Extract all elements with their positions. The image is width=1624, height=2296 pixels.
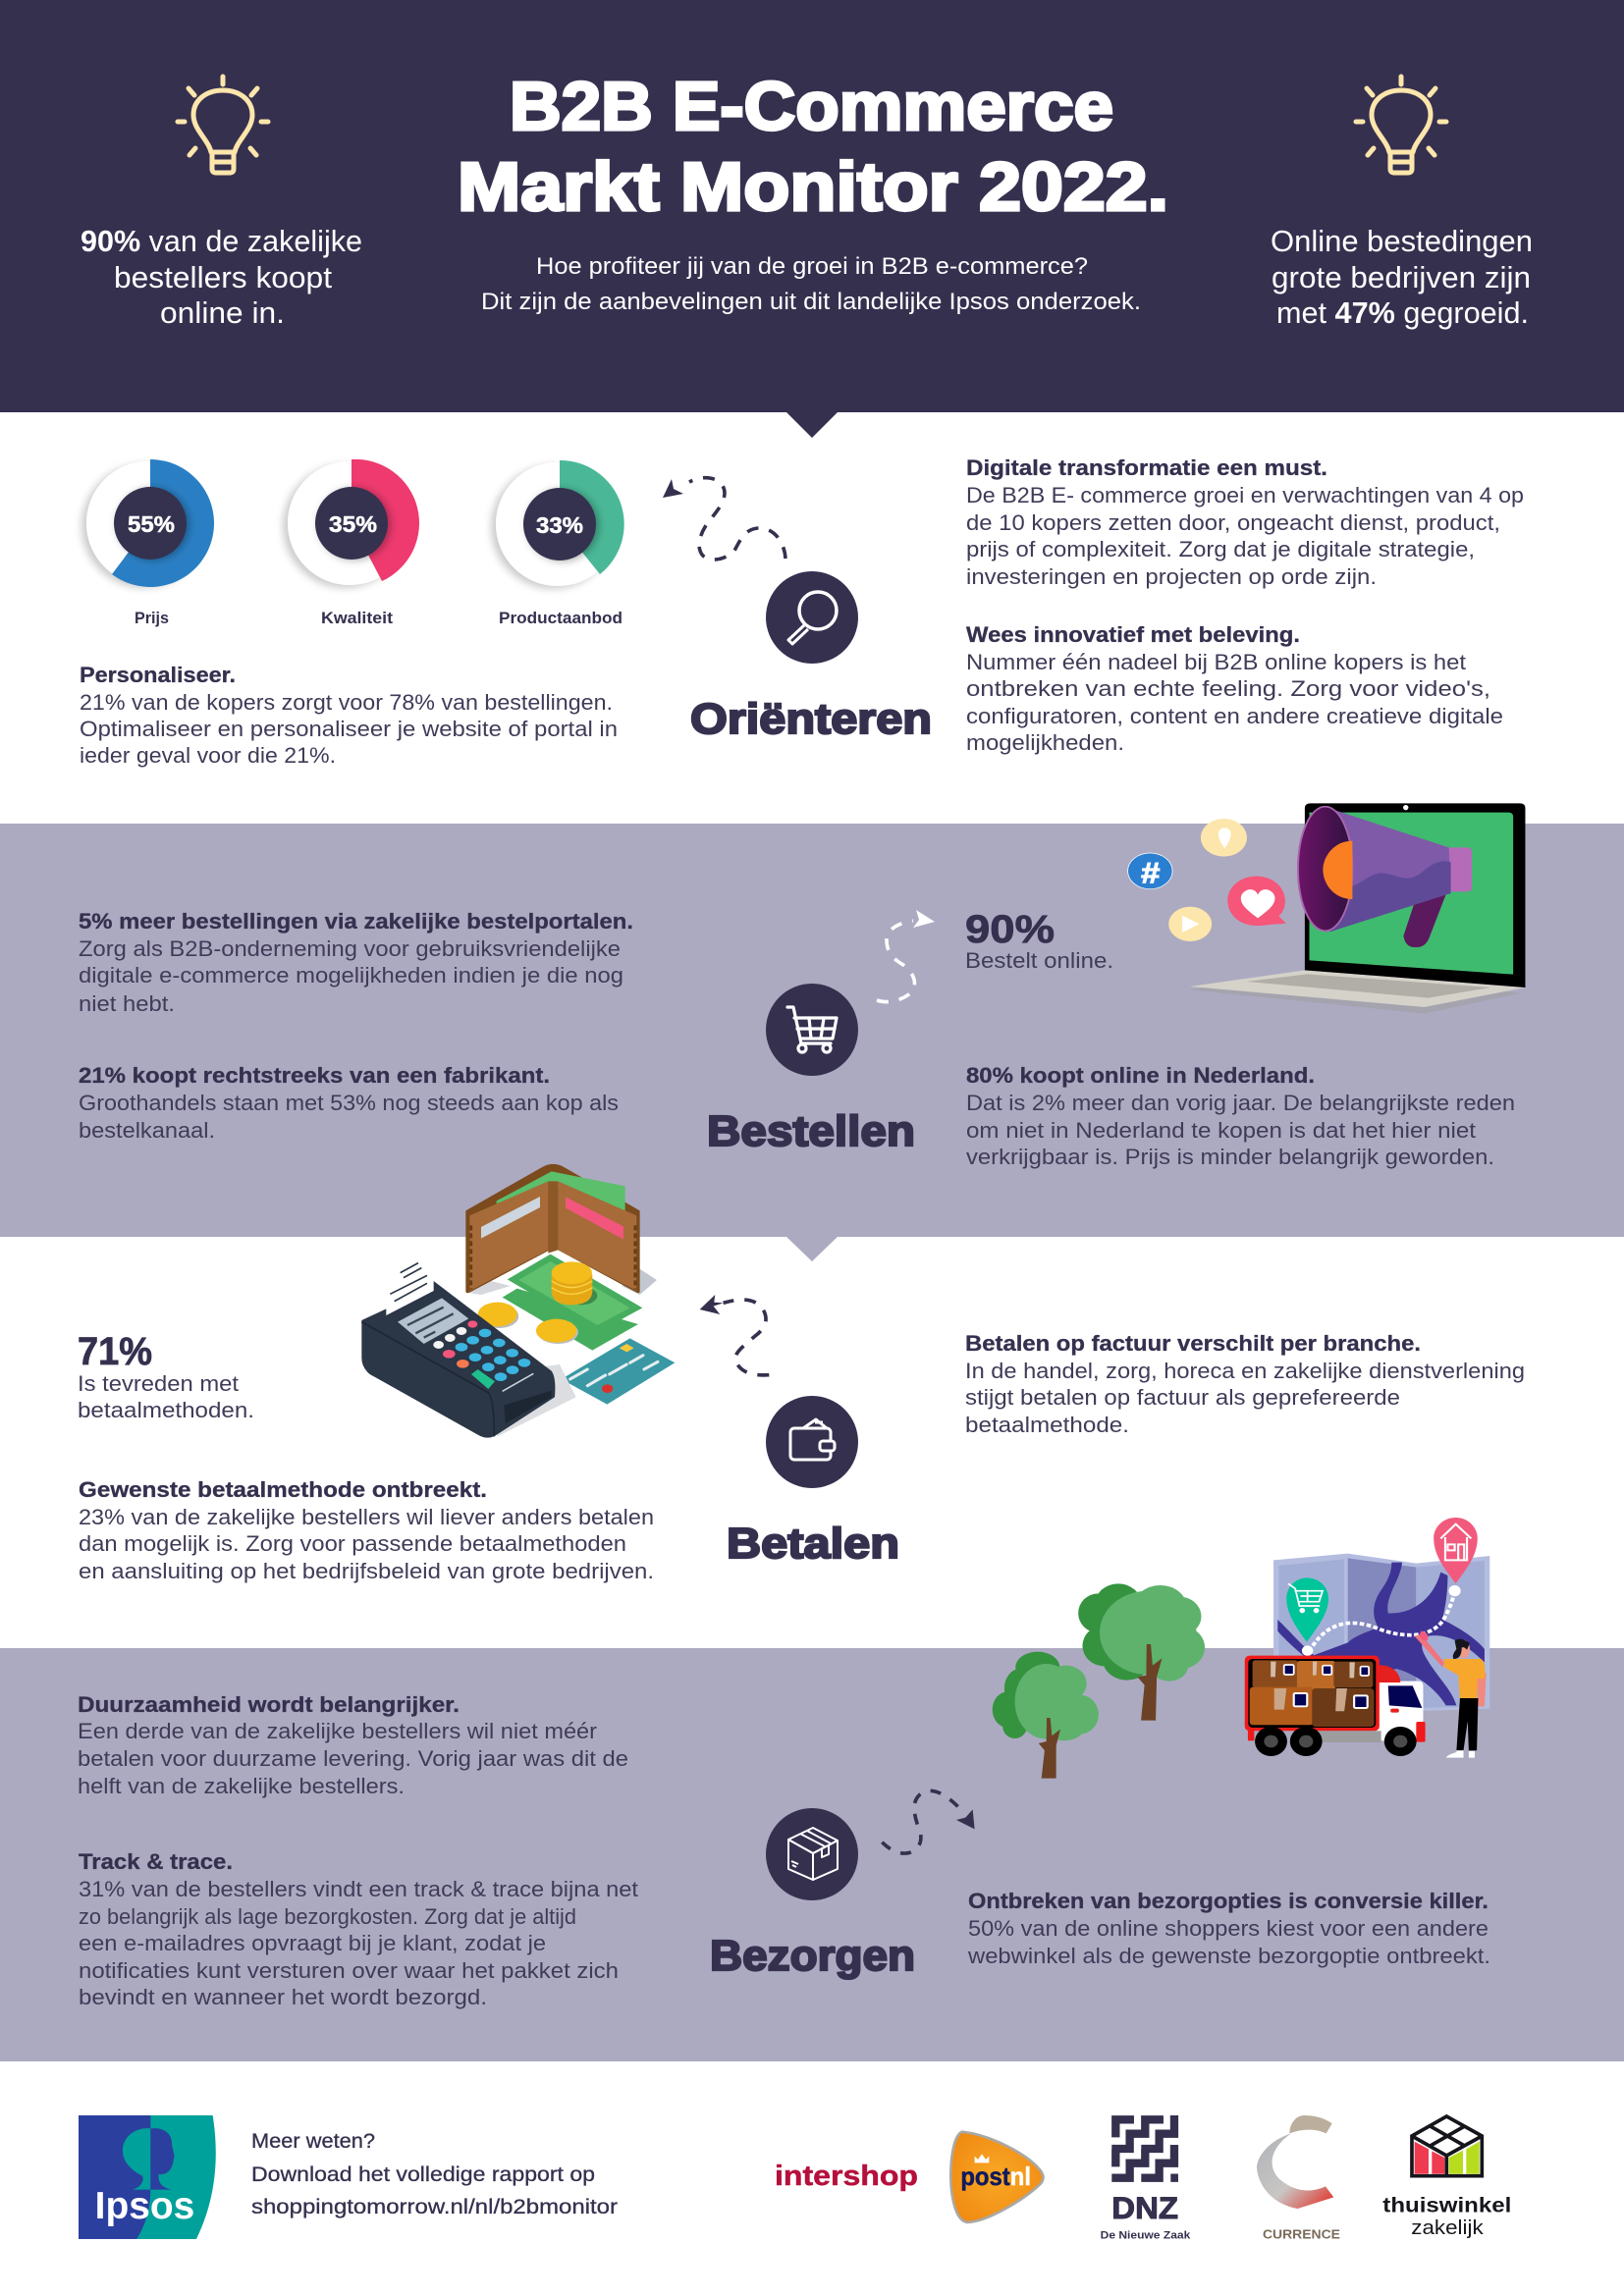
- text block: factuur: betaalmethode.: [965, 1413, 1129, 1437]
- text block: Wees innovatief: mogelijkheden.: [966, 730, 1124, 755]
- text block: Digitale transformatie: prijs of complexiteit. Zorg dat je digitale strategie,: [966, 537, 1475, 561]
- stat: 90% bestelt online: [965, 908, 1113, 973]
- subtitle: Dit zijn de aanbevelingen uit dit landelijke Ipsos onderzoek.: [481, 289, 1141, 315]
- logo: Currence: CURRENCE: [1263, 2228, 1340, 2242]
- text block: 80% Nederland: om niet in Nederland te kopen is dat het hier niet: [966, 1118, 1476, 1143]
- stat: 90%: 90% van de zakelijke: [81, 224, 362, 258]
- text block: Gewenste betaalmethode: dan mogelijk is. Zorg voor passende betaalmethoden: [79, 1531, 626, 1556]
- text block: rechtstreeks fabrikant: Groothandels staan met 53% nog steeds aan kop als: [79, 1091, 619, 1115]
- text block: Personaliseer: 21% van de kopers zorgt voor 78% van bestellingen.: [80, 690, 613, 715]
- arrow: Bestellen dashed: [877, 910, 935, 1002]
- logo: thuiswinkel zakelijk: [1382, 2116, 1511, 2239]
- text block: Wees innovatief: [966, 622, 1503, 755]
- stat: 71% tevreden: Is tevreden met: [78, 1371, 239, 1396]
- text block: Wees innovatief: Wees innovatief met beleving.: [966, 622, 1300, 647]
- text block: bestelportalen: Zorg als B2B-onderneming voor gebruiksvriendelijke: [79, 936, 621, 961]
- text block: 80% Nederland: [966, 1063, 1515, 1169]
- text block: Digitale transformatie: Digitale transformatie een must.: [966, 455, 1327, 480]
- logo: Ipsos: Ipsos: [95, 2184, 194, 2227]
- text block: Track & trace: een e-mailadres opvraagt bij je klant, zodat je: [79, 1931, 546, 1955]
- text block: Personaliseer: ieder geval voor die 21%.: [80, 743, 336, 768]
- logo: DNZ De Nieuwe Zaak: DNZ: [1111, 2190, 1178, 2225]
- donut chart: Prijs 55%: 55%: [128, 511, 175, 537]
- heading: Orienteren: Oriënteren: [690, 695, 932, 743]
- stat: 90% bestelt online: Bestelt online.: [965, 948, 1113, 973]
- icon: light bulb left: [178, 77, 268, 173]
- subtitle: Hoe profiteer jij van de groei in B2B e-commerce?: [536, 253, 1088, 280]
- text block: Track & trace: Track & trace.: [79, 1849, 233, 1874]
- stat: 47%: grote bedrijven zijn: [1272, 260, 1531, 294]
- text block: Personaliseer: Optimaliseer en personaliseer je website of portal in: [80, 717, 618, 741]
- text block: Gewenste betaalmethode: 23% van de zakelijke bestellers wil liever anders betalen: [79, 1505, 654, 1529]
- text block: 80% Nederland: verkrijgbaar is. Prijs is minder belangrijk geworden.: [966, 1145, 1494, 1169]
- title: B2B E-Commerce: [510, 68, 1113, 144]
- logo: postnl: [950, 2132, 1043, 2222]
- arrow: Orienteren dashed: [663, 478, 785, 560]
- logo: DNZ De Nieuwe Zaak: De Nieuwe Zaak: [1101, 2230, 1191, 2242]
- logo: thuiswinkel zakelijk: thuiswinkel: [1382, 2193, 1511, 2216]
- donut chart: Kwaliteit 35%: Kwaliteit: [321, 609, 393, 627]
- illustration: wallet and payment terminal: [361, 1164, 675, 1438]
- text block: factuur: Betalen op factuur verschilt per branche.: [965, 1331, 1421, 1356]
- logo: Currence: [1257, 2115, 1340, 2242]
- logo: thuiswinkel zakelijk: zakelijk: [1411, 2216, 1484, 2239]
- text block: 80% Nederland: Dat is 2% meer dan vorig jaar. De belangrijkste reden: [966, 1091, 1515, 1115]
- illustration: laptop with megaphone: [1128, 803, 1525, 1014]
- stat: 71% tevreden: betaalmethoden.: [78, 1398, 254, 1422]
- text block: Duurzaamheid: [78, 1692, 628, 1798]
- text block: Duurzaamheid: betalen voor duurzame levering. Vorig jaar was dit de: [78, 1746, 628, 1771]
- text block: Track & trace: [79, 1849, 638, 2009]
- logo: intershop: intershop: [775, 2161, 918, 2192]
- logo: DNZ De Nieuwe Zaak: [1101, 2115, 1191, 2242]
- donut chart: Productaanbod 33%: 33%: [536, 512, 583, 538]
- tree: small: [993, 1652, 1099, 1779]
- text block: Track & trace: 31% van de bestellers vindt een track & trace bijna net: [79, 1877, 638, 1901]
- footer text: download: [251, 2130, 618, 2218]
- stat: 71% tevreden: [78, 1330, 254, 1422]
- text block: Digitale transformatie: investeringen en projecten op orde zijn.: [966, 564, 1377, 589]
- donut chart: Productaanbod 33%: Productaanbod: [499, 609, 623, 627]
- band: Bestellen background: [0, 824, 1624, 1237]
- text block: Duurzaamheid: Een derde van de zakelijke bestellers wil niet méér: [78, 1719, 597, 1743]
- arrow: Bezorgen dashed: [882, 1790, 975, 1853]
- text block: bestelportalen: digitale e-commerce mogelijkheden indien je die nog: [79, 963, 623, 988]
- text block: Track & trace: notificaties kunt versturen over waar het pakket zich: [79, 1958, 619, 1983]
- illustration: laptop with megaphone: #: [1141, 856, 1160, 889]
- icon: light bulb right: [1356, 77, 1446, 173]
- heading: Bestellen: Bestellen: [707, 1107, 915, 1155]
- stat: 47%: [1271, 224, 1533, 330]
- truck: [1245, 1656, 1426, 1756]
- icon: magnifier: [766, 571, 858, 664]
- tree: large: [1078, 1583, 1205, 1721]
- donut chart: Kwaliteit 35%: [288, 459, 419, 627]
- subtitle: [481, 253, 1141, 315]
- text block: bezorgopties: 50% van de online shoppers kiest voor een andere: [968, 1916, 1489, 1941]
- text block: rechtstreeks fabrikant: bestelkanaal.: [79, 1118, 215, 1143]
- text block: rechtstreeks fabrikant: 21% koopt rechtstreeks van een fabrikant.: [79, 1063, 550, 1088]
- donut chart: Kwaliteit 35%: 35%: [329, 511, 377, 537]
- text block: factuur: [965, 1331, 1525, 1437]
- band: Bezorgen background: [0, 1648, 1624, 2061]
- text block: Duurzaamheid: helft van de zakelijke bestellers.: [78, 1774, 405, 1798]
- band pointer: [785, 1236, 839, 1261]
- heading: Betalen: Betalen: [727, 1520, 899, 1568]
- stat: 71% tevreden: 71%: [78, 1330, 152, 1373]
- text block: bestelportalen: niet hebt.: [79, 991, 175, 1016]
- pin: cart: [1286, 1577, 1328, 1642]
- title: [458, 68, 1168, 225]
- text block: factuur: stijgt betalen op factuur als geprefereerde: [965, 1385, 1400, 1410]
- icon: shopping cart: [766, 984, 858, 1076]
- pin: home: [1434, 1518, 1478, 1583]
- text block: Wees innovatief: ontbreken van echte feeling. Zorg voor video's,: [966, 676, 1490, 701]
- heading: Bezorgen: Bezorgen: [710, 1932, 915, 1980]
- text block: bestelportalen: 5% meer bestellingen via zakelijke bestelportalen.: [79, 909, 633, 934]
- donut chart: Prijs 55%: Prijs: [135, 609, 169, 627]
- person: [1415, 1631, 1487, 1758]
- text block: Digitale transformatie: De B2B E- commerce groei en verwachtingen van 4 op: [966, 483, 1524, 507]
- icon: wallet: [766, 1396, 858, 1488]
- icon: parcel box: [766, 1808, 858, 1900]
- arrow: Betalen dashed: [700, 1295, 769, 1375]
- donut chart: Prijs 55%: [86, 459, 214, 627]
- map: [1273, 1554, 1489, 1711]
- stat: 47%: met 47% gegroeid.: [1276, 295, 1529, 330]
- text block: Track & trace: zo belangrijk als lage bezorgkosten. Zorg dat je altijd: [79, 1904, 576, 1929]
- text block: Digitale transformatie: [966, 455, 1524, 589]
- stat: 47%: Online bestedingen: [1271, 224, 1533, 258]
- stat: 90%: online in.: [160, 295, 285, 330]
- text block: Gewenste betaalmethode: Gewenste betaalmethode ontbreekt.: [79, 1477, 487, 1502]
- stat: 90%: [81, 224, 362, 330]
- text block: Gewenste betaalmethode: en aansluiting op het bedrijfsbeleid van grote bedrijven.: [79, 1559, 654, 1583]
- text block: Wees innovatief: Nummer één nadeel bij B2B online kopers is het: [966, 650, 1466, 674]
- text block: Track & trace: bevindt en wanneer het wordt bezorgd.: [79, 1985, 487, 2009]
- text block: bezorgopties: [967, 1889, 1490, 1968]
- title: Markt Monitor 2022.: [458, 148, 1168, 225]
- donut chart: Productaanbod 33%: [496, 460, 624, 627]
- text block: bestelportalen: [79, 909, 633, 1016]
- text block: bezorgopties: webwinkel als de gewenste bezorgoptie ontbreekt.: [967, 1944, 1490, 1968]
- text block: Digitale transformatie: de 10 kopers zetten door, ongeacht dienst, product,: [966, 510, 1500, 535]
- footer text: download: Meer weten?: [251, 2130, 375, 2153]
- logo: postnl: postnl: [960, 2162, 1031, 2191]
- text block: Wees innovatief: configuratoren, content en andere creatieve digitale: [966, 704, 1503, 728]
- header panel: [0, 0, 1624, 438]
- text block: bezorgopties: Ontbreken van bezorgopties is conversie killer.: [968, 1889, 1489, 1913]
- footer text: download: shoppingtomorrow.nl/nl/b2bmonitor: [251, 2196, 618, 2218]
- text block: Personaliseer: Personaliseer.: [80, 663, 236, 687]
- footer text: download: Download het volledige rapport op: [251, 2163, 595, 2186]
- text block: rechtstreeks fabrikant: [79, 1063, 619, 1143]
- text block: factuur: In de handel, zorg, horeca en zakelijke dienstverlening: [965, 1359, 1525, 1383]
- stat: 90%: bestellers koopt: [114, 260, 332, 294]
- logo: Ipsos: [79, 2115, 216, 2239]
- text block: 80% Nederland: 80% koopt online in Nederland.: [966, 1063, 1315, 1088]
- text block: Duurzaamheid: Duurzaamheid wordt belangrijker.: [78, 1692, 460, 1717]
- stat: 90% bestelt online: 90%: [965, 908, 1055, 951]
- text block: Personaliseer: [80, 663, 618, 768]
- illustration: trees, map and delivery truck: [993, 1518, 1489, 1779]
- text block: Gewenste betaalmethode: [79, 1477, 654, 1583]
